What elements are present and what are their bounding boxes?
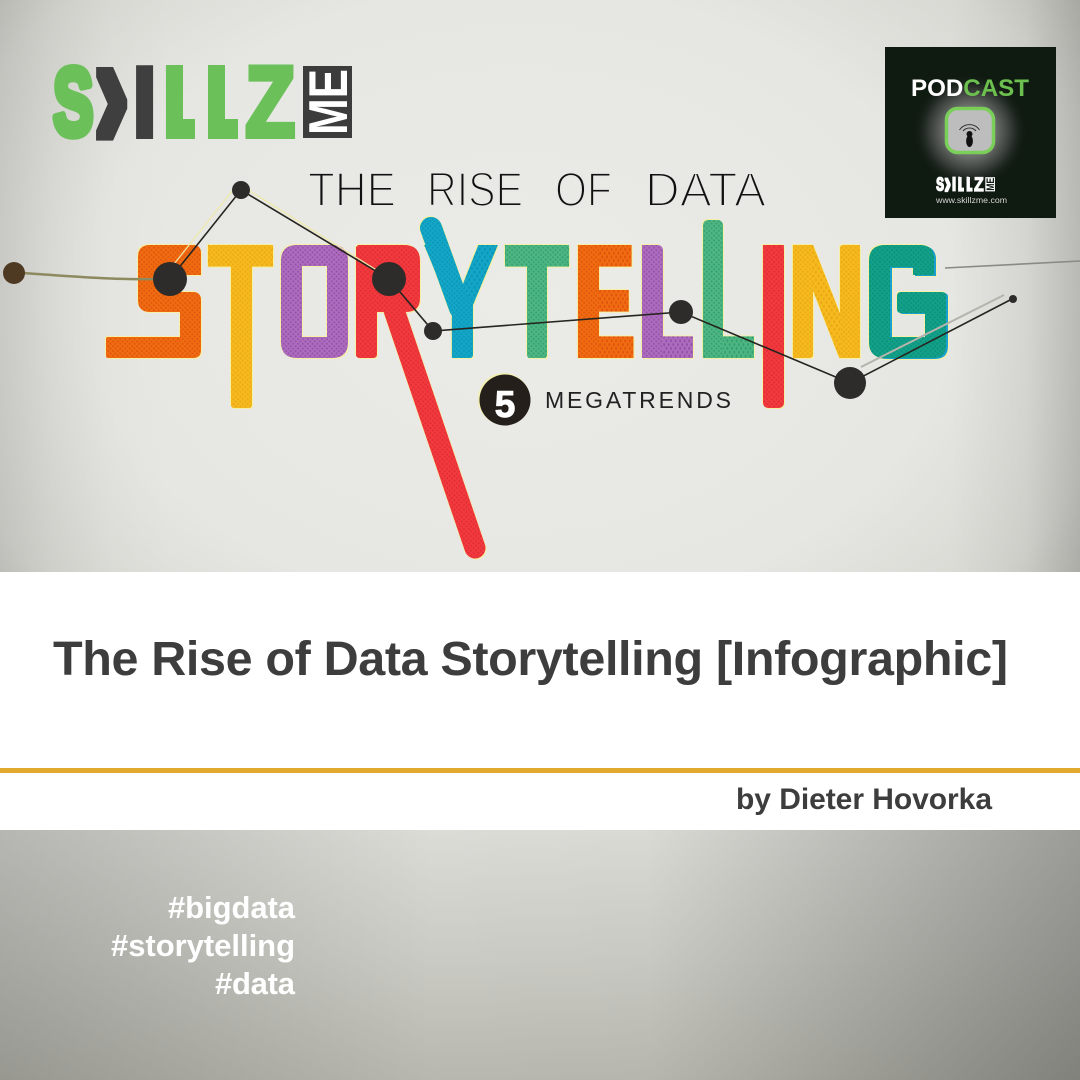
website url: www.skillzme.com [935, 195, 1007, 205]
letter S: S [135, 213, 205, 390]
logo: SKILLZ ME [53, 2, 359, 181]
mini logo: I [952, 174, 957, 196]
heading: the rise of data: RISE [427, 164, 523, 217]
heading: the rise of data: OF [555, 164, 612, 217]
letter Y: Y [425, 213, 497, 390]
mini logo [936, 164, 997, 200]
chart: line with data points [3, 181, 1080, 399]
heading: the rise of data: DATA [645, 164, 766, 217]
badge: number 5 [478, 373, 530, 426]
title: The Rise of Data Storytelling [Infographic] [53, 632, 1008, 686]
letter R with long tail [351, 213, 475, 548]
hashtags: #data [215, 966, 296, 1001]
letter R with long tail: R [351, 213, 421, 390]
heading: the rise of data: THE [308, 164, 396, 217]
panel: lower paper background [0, 830, 1080, 1080]
mini logo: S [936, 175, 944, 196]
icon: podcast button [912, 73, 1028, 189]
letter G [868, 244, 949, 360]
letter S [105, 244, 202, 359]
text: megatrends: MEGATRENDS [545, 387, 731, 413]
letter O [280, 244, 349, 359]
logo: SKILLZ ME: Z [246, 47, 295, 158]
mini logo: L [958, 175, 964, 196]
heading: the rise of data [308, 164, 766, 217]
logo: SKILLZ ME: L [164, 47, 196, 160]
logo: SKILLZ ME: › [95, 2, 128, 181]
heading: storytelling colored letters [106, 212, 950, 548]
letter T: T [208, 213, 273, 390]
letter I: I [756, 213, 791, 391]
letter N: N [787, 213, 866, 390]
badge: number 5: 5 [495, 384, 515, 425]
mini logo: Z [974, 173, 984, 195]
letter G: G [866, 213, 950, 390]
hashtags [111, 890, 296, 1001]
letter O: O [278, 212, 351, 390]
logo: SKILLZ ME: I [132, 45, 157, 159]
letter E: E [573, 213, 636, 390]
podcast label: PODCAST [911, 75, 1029, 102]
logo: SKILLZ ME: L [206, 46, 239, 159]
byline: by Dieter Hovorka [736, 783, 992, 816]
mini logo: ME [985, 178, 997, 191]
mini logo: › [944, 164, 951, 200]
logo: SKILLZ ME: S [53, 49, 93, 155]
panel: paper hero background [0, 0, 1080, 572]
hashtags: #storytelling [111, 928, 295, 963]
podcast badge [885, 47, 1056, 218]
mini logo: L [966, 174, 973, 196]
letter L tall: L [698, 213, 756, 390]
divider: gold rule [0, 768, 1080, 773]
logo: SKILLZ ME: ME [297, 69, 359, 135]
letter T: T [505, 214, 569, 390]
hashtags: #bigdata [168, 890, 296, 925]
letter L: L [637, 213, 695, 390]
